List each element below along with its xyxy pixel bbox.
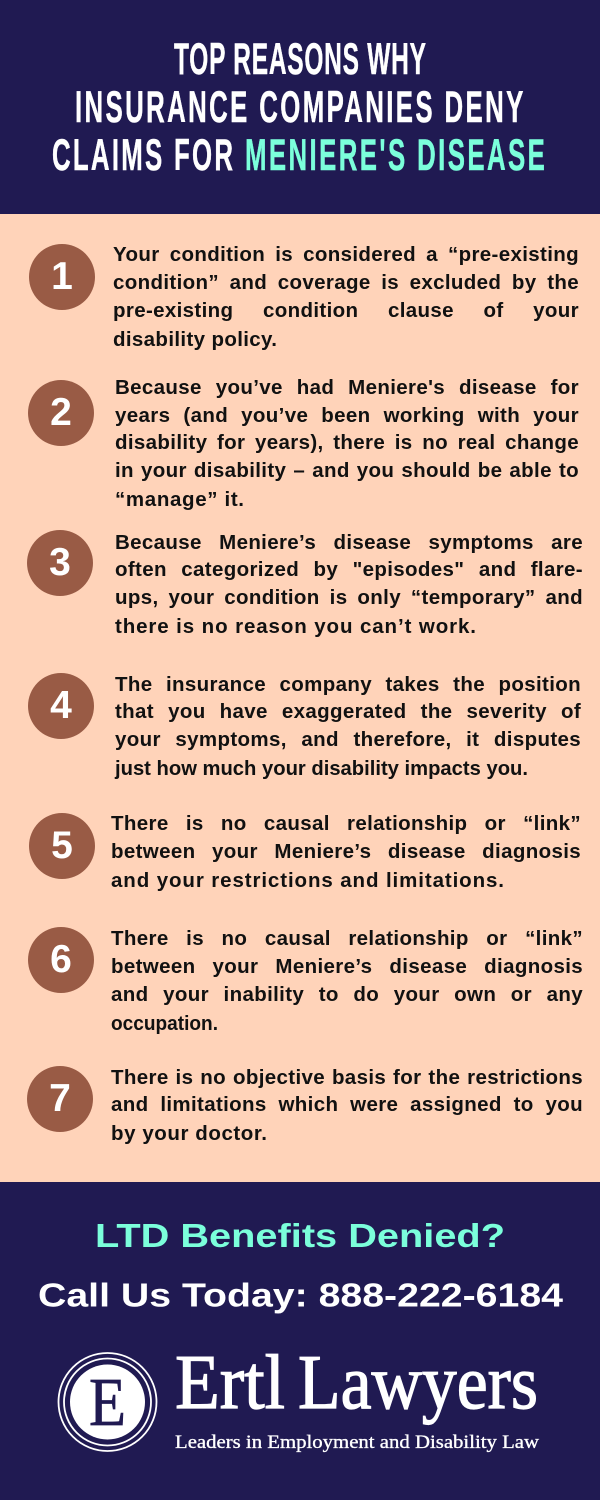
reason 3: Because Meniere’s disease symptoms are	[115, 531, 583, 554]
number badge 6	[28, 927, 94, 993]
call to action: LTD Benefits Denied?	[95, 1217, 505, 1254]
reason 1: Your condition is considered a “pre-existing	[113, 243, 579, 266]
reason 6: and your inability to do your own or any	[111, 983, 583, 1006]
reason 7: by your doctor.	[111, 1122, 267, 1145]
reason 6: occupation.	[111, 1012, 218, 1035]
reason 5: There is no causal relationship or “link”	[111, 812, 581, 835]
title: CLAIMS FOR	[52, 130, 233, 180]
logo	[58, 1342, 540, 1453]
reason 5	[29, 812, 581, 892]
header panel	[0, 0, 600, 214]
reason 7: and limitations which were assigned to you	[111, 1093, 583, 1116]
number badge 1: 1	[51, 255, 73, 298]
reason 1: pre-existing condition clause of your	[113, 299, 579, 322]
number badge 7: 7	[49, 1077, 71, 1120]
reason 5: and your restrictions and limitations.	[111, 869, 504, 892]
number badge 3: 3	[49, 541, 71, 584]
number badge 2: 2	[50, 391, 72, 434]
title: TOP REASONS WHY	[174, 33, 426, 84]
reason 4: that you have exaggerated the severity of	[115, 700, 581, 723]
reason 2: years (and you’ve been working with your	[115, 404, 579, 427]
reason 3: ups, your condition is only “temporary” and	[115, 586, 583, 609]
reason 3: there is no reason you can’t work.	[115, 615, 476, 638]
number badge 5: 5	[51, 824, 73, 867]
reason 4	[28, 673, 581, 780]
number badge 5	[29, 813, 95, 879]
logo tagline: Leaders in Employment and Disability Law	[175, 1432, 539, 1453]
reason 2: Because you’ve had Meniere's disease for	[115, 376, 579, 399]
footer panel	[0, 1182, 600, 1500]
number badge 3	[27, 530, 93, 596]
reason 6	[28, 927, 583, 1035]
reason 6: There is no causal relationship or “link”	[111, 927, 583, 950]
reason 4: your symptoms, and therefore, it disputes	[115, 728, 581, 751]
number badge 4	[28, 673, 94, 739]
reason 4: just how much your disability impacts you.	[114, 757, 528, 780]
number badge 4: 4	[50, 684, 72, 727]
title: MENIERE'S DISEASE	[245, 130, 545, 180]
reason 4: The insurance company takes the position	[115, 673, 581, 696]
title	[52, 33, 545, 180]
reason 1: condition” and coverage is excluded by the	[113, 271, 579, 294]
number badge 1	[29, 244, 95, 310]
reason 3	[27, 530, 583, 638]
call to action	[38, 1217, 564, 1314]
reason 7	[27, 1066, 583, 1145]
reason 2: in your disability – and you should be able to	[115, 459, 579, 482]
reason 2: disability for years), there is no real change	[115, 431, 579, 454]
logo emblem	[58, 1353, 156, 1451]
logo wordmark	[175, 1339, 538, 1425]
reason 1: disability policy.	[113, 328, 277, 351]
call to action: Call Us Today: 888-222-6184	[38, 1276, 564, 1314]
reason 2	[28, 376, 579, 511]
title: INSURANCE COMPANIES DENY	[75, 82, 523, 132]
number badge 6: 6	[50, 938, 72, 981]
reason 2: “manage” it.	[115, 488, 244, 511]
reason 7: There is no objective basis for the restrictions	[111, 1066, 583, 1089]
number badge 2	[28, 380, 94, 446]
reason 1	[29, 243, 579, 351]
reason 5: between your Meniere’s disease diagnosis	[111, 840, 581, 863]
reason 3: often categorized by "episodes" and flare-	[115, 558, 583, 581]
logo emblem: E	[89, 1364, 126, 1440]
reason 6: between your Meniere’s disease diagnosis	[111, 955, 583, 978]
number badge 7	[27, 1066, 93, 1132]
